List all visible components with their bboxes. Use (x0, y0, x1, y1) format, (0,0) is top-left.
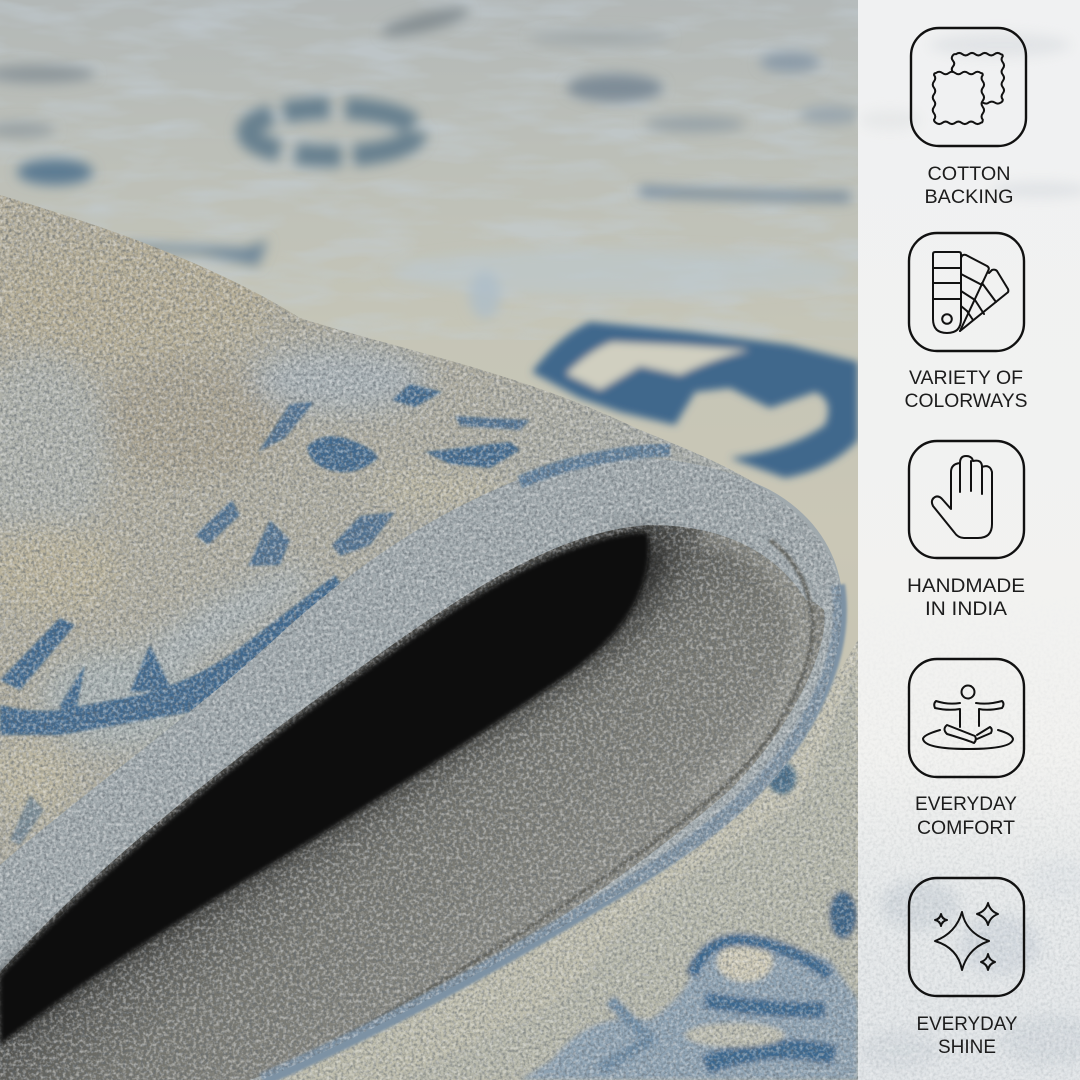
feature: everyday comfort (909, 659, 1024, 839)
icon: seated meditation figure (909, 659, 1024, 777)
outer blue edge (262, 585, 840, 1080)
icon: sparkles (909, 878, 1024, 996)
icon: colour swatch fan (909, 233, 1024, 351)
feature: everyday shine (909, 878, 1024, 1058)
icon: hand (909, 441, 1024, 558)
feature: cotton backing (911, 28, 1026, 208)
blurred top pattern (0, 2, 860, 319)
label: cotton backing: COTTON (928, 164, 1010, 185)
label: everyday shine: SHINE (938, 1037, 996, 1058)
label: handmade in india: IN INDIA (925, 599, 1007, 620)
lower-right wool texture (280, 640, 858, 1080)
underside rim shading (690, 535, 803, 800)
side panel background (858, 0, 1080, 1080)
blue woven motifs on the roll (0, 384, 530, 845)
lower-right pattern (522, 669, 858, 1080)
blue stitching on lip (520, 450, 670, 482)
label: handmade in india: HANDMADE (907, 576, 1025, 597)
label: everyday comfort: COMFORT (917, 818, 1015, 839)
feature: handmade in india (907, 441, 1025, 620)
label: everyday shine: EVERYDAY (916, 1014, 1018, 1035)
label: everyday comfort: EVERYDAY (915, 794, 1017, 815)
icon: fabric swatches (911, 28, 1026, 146)
underside of the rug (0, 525, 825, 1080)
feature: variety of colorways (904, 233, 1028, 412)
rug surface tonal patches (0, 240, 510, 820)
rolled rug (0, 195, 848, 1080)
label: variety of colorways: VARIETY OF (909, 368, 1023, 389)
photo background: blurred rug surface (0, 0, 860, 1080)
rug top surface (0, 195, 842, 1080)
woven texture (0, 195, 842, 1080)
shadow below hollow (0, 540, 650, 1010)
label: cotton backing: BACKING (924, 187, 1014, 208)
hem stitching (330, 540, 813, 1045)
large blue motif behind roll (532, 322, 858, 478)
front lip of the roll (0, 459, 842, 972)
label: variety of colorways: COLORWAYS (904, 391, 1028, 412)
dark hollow (0, 532, 649, 1045)
